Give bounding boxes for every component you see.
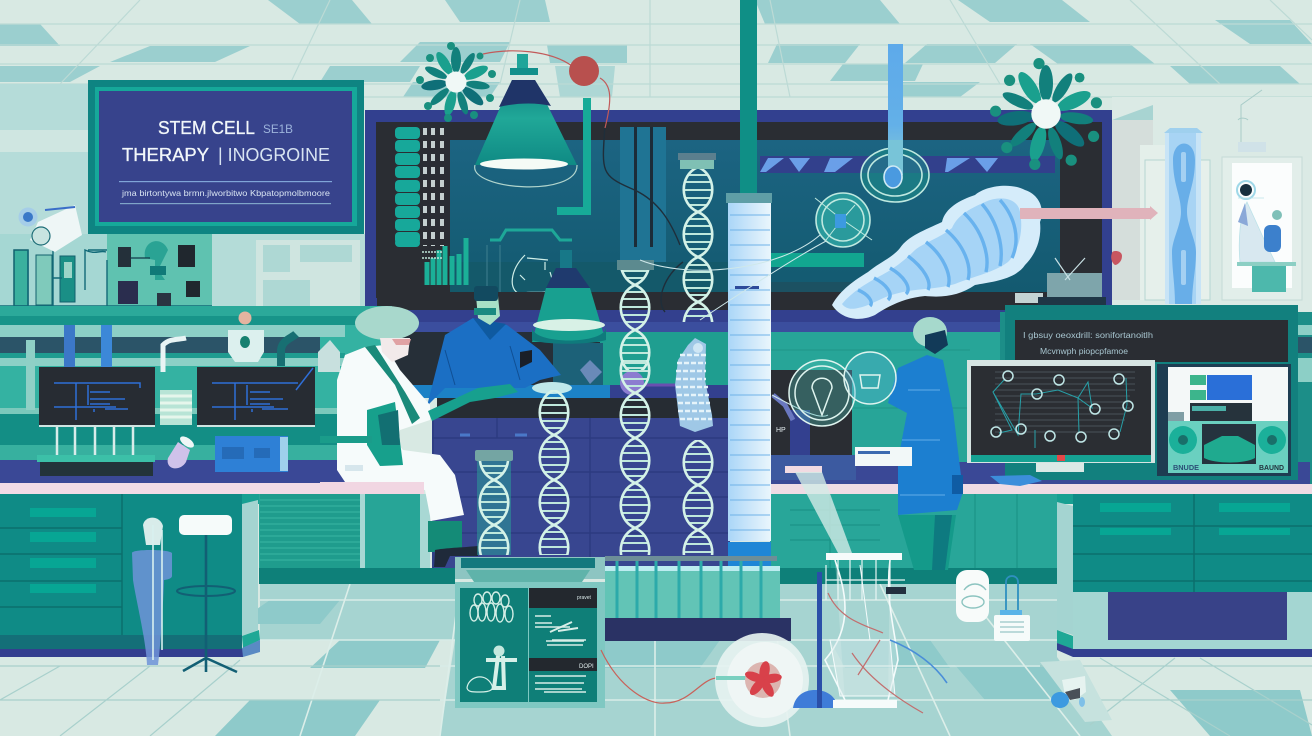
- small lamp: [532, 250, 606, 344]
- central bench with drawers: [392, 332, 730, 568]
- DNA helix lower: [537, 390, 571, 555]
- blue stand with glass apparatus: [785, 466, 947, 713]
- IV stand and bag: [132, 518, 172, 665]
- cell cluster sketch: [470, 592, 513, 622]
- dashboard screen: BAUND: [1259, 465, 1284, 472]
- right wall board: [1005, 305, 1298, 480]
- left lower cabinets: [0, 494, 260, 657]
- dashboard screen: [1157, 364, 1291, 476]
- pink arrow: [1020, 206, 1158, 220]
- information board bottom: pravet: [577, 595, 592, 601]
- icon: microscope head: [18, 205, 82, 252]
- figure sketch: [467, 646, 517, 692]
- centre lab dark screen: [770, 370, 856, 480]
- icon: red cell with wire: [483, 51, 610, 128]
- left monitor 1: [39, 367, 155, 427]
- ceiling lamp: [475, 54, 577, 187]
- pink counter top: [0, 483, 1312, 494]
- blue lung cell: [832, 186, 1042, 319]
- network sketch on screen: [487, 230, 572, 294]
- bench glass dish on counter: [532, 360, 680, 395]
- pink counter overlay seat: [320, 482, 424, 494]
- board caption: Mcvnwph piopcpfamoe: [1040, 347, 1129, 356]
- glass circles right of column: [789, 352, 896, 426]
- information board bottom: DOPI: [579, 664, 594, 670]
- scientist in blue coat: [427, 286, 561, 406]
- thin dark wire: [603, 125, 683, 312]
- network monitor: [967, 360, 1155, 472]
- microscope above panel: [1015, 251, 1122, 305]
- blue overhead pillar: [888, 44, 903, 179]
- small pump device: [994, 576, 1030, 641]
- title text: STEM CELL: [158, 117, 255, 138]
- right blue cylinder: [1164, 128, 1203, 304]
- bench rack and sample box: [37, 427, 288, 476]
- bracket pipe: [557, 98, 587, 211]
- information board bottom: [455, 557, 605, 708]
- DNA helix upper right: [678, 153, 716, 322]
- hero screen window: [365, 110, 1112, 332]
- triangle band on screen: [760, 156, 1055, 173]
- blue cell cluster: [675, 338, 713, 432]
- bust model: [228, 312, 264, 362]
- centre lab dark screen: HP: [776, 427, 786, 434]
- title panel: [88, 80, 364, 234]
- test tubes rack: [603, 556, 791, 641]
- background: ceiling: [0, 0, 1312, 112]
- floor: [0, 584, 1312, 736]
- thin wires: [640, 235, 828, 416]
- DNA helix right lower: [681, 440, 715, 555]
- background: side walls: [0, 84, 1312, 318]
- blue cabinet panel: [1108, 592, 1287, 640]
- middle left cabinets: [259, 494, 455, 584]
- teal central pole: [740, 0, 757, 196]
- stool: [177, 515, 237, 672]
- scientist in white coat: [320, 306, 518, 567]
- stem cell magnifier circles on screen: [815, 140, 929, 247]
- board text lines: [535, 616, 586, 692]
- dashboard screen: BNUDE: [1173, 465, 1199, 472]
- title text: | INOGROINE: [218, 144, 330, 165]
- small white sensor: [956, 570, 989, 622]
- scientist blue right: [855, 317, 963, 570]
- right lower cabinets: [770, 494, 1312, 657]
- red catheter wire: [601, 650, 716, 703]
- title text: SE1B: [263, 122, 293, 136]
- teal back wall band: [0, 306, 1312, 484]
- floor blue fragment: [1051, 676, 1086, 708]
- subtitle text: jma birtontywa brmn.jlworbitwo Kbpatopmolbmoore: [121, 188, 330, 198]
- left monitor 2: [197, 367, 315, 427]
- DNA helix centre upper: [617, 260, 654, 370]
- title text: [122, 117, 330, 165]
- icon: green virus top centre: [416, 42, 496, 122]
- DNA helix small glass: [475, 450, 513, 555]
- board caption: [1023, 330, 1153, 356]
- central graduated column: [726, 193, 772, 570]
- stem cell dish: [715, 633, 809, 727]
- left wall instruments: [0, 205, 212, 316]
- gene data list on screen: [395, 127, 466, 285]
- title text: THERAPY: [122, 144, 209, 165]
- board caption: I gbsuy oeoxdrill: sonifortanoitlh: [1023, 330, 1153, 340]
- icon: green virus top right: [990, 58, 1102, 170]
- blue tablet on counter: [990, 475, 1042, 486]
- shelf items: [26, 312, 340, 425]
- DNA helix centre lower: [618, 360, 652, 555]
- right doorway with figure: [1222, 90, 1302, 300]
